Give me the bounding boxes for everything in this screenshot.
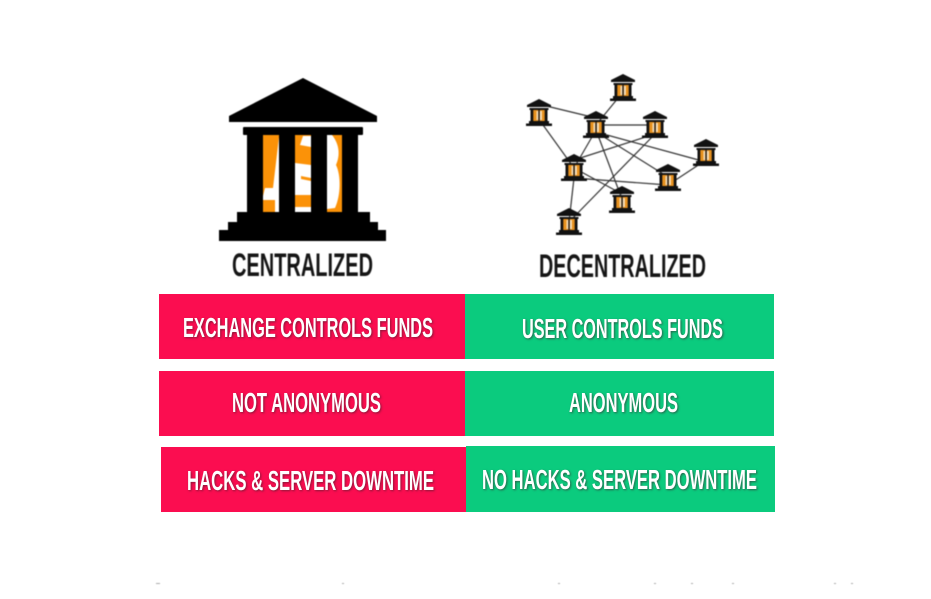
row: anonymity, centralized: NOT ANONYMOUS [232, 387, 381, 418]
icon: decentralized network of banks [526, 74, 719, 235]
row: controls funds, decentralized [465, 294, 774, 359]
heading: decentralized: DECENTRALIZED [539, 248, 706, 284]
row: controls funds, decentralized: USER CONTROLS FUNDS [522, 313, 723, 344]
icon: centralized bank with bitcoin [219, 78, 386, 241]
row: anonymity, decentralized: ANONYMOUS [569, 387, 678, 418]
row: downtime, decentralized [466, 446, 775, 512]
heading: centralized: CENTRALIZED [232, 247, 373, 283]
row: downtime, centralized: HACKS & SERVER DOWNTIME [187, 465, 434, 496]
row: controls funds, centralized: EXCHANGE CONTROLS FUNDS [183, 312, 433, 343]
row: anonymity, decentralized [465, 371, 774, 436]
row: controls funds, centralized [159, 294, 465, 359]
row: anonymity, centralized [159, 371, 465, 436]
row: downtime, centralized [161, 447, 466, 512]
